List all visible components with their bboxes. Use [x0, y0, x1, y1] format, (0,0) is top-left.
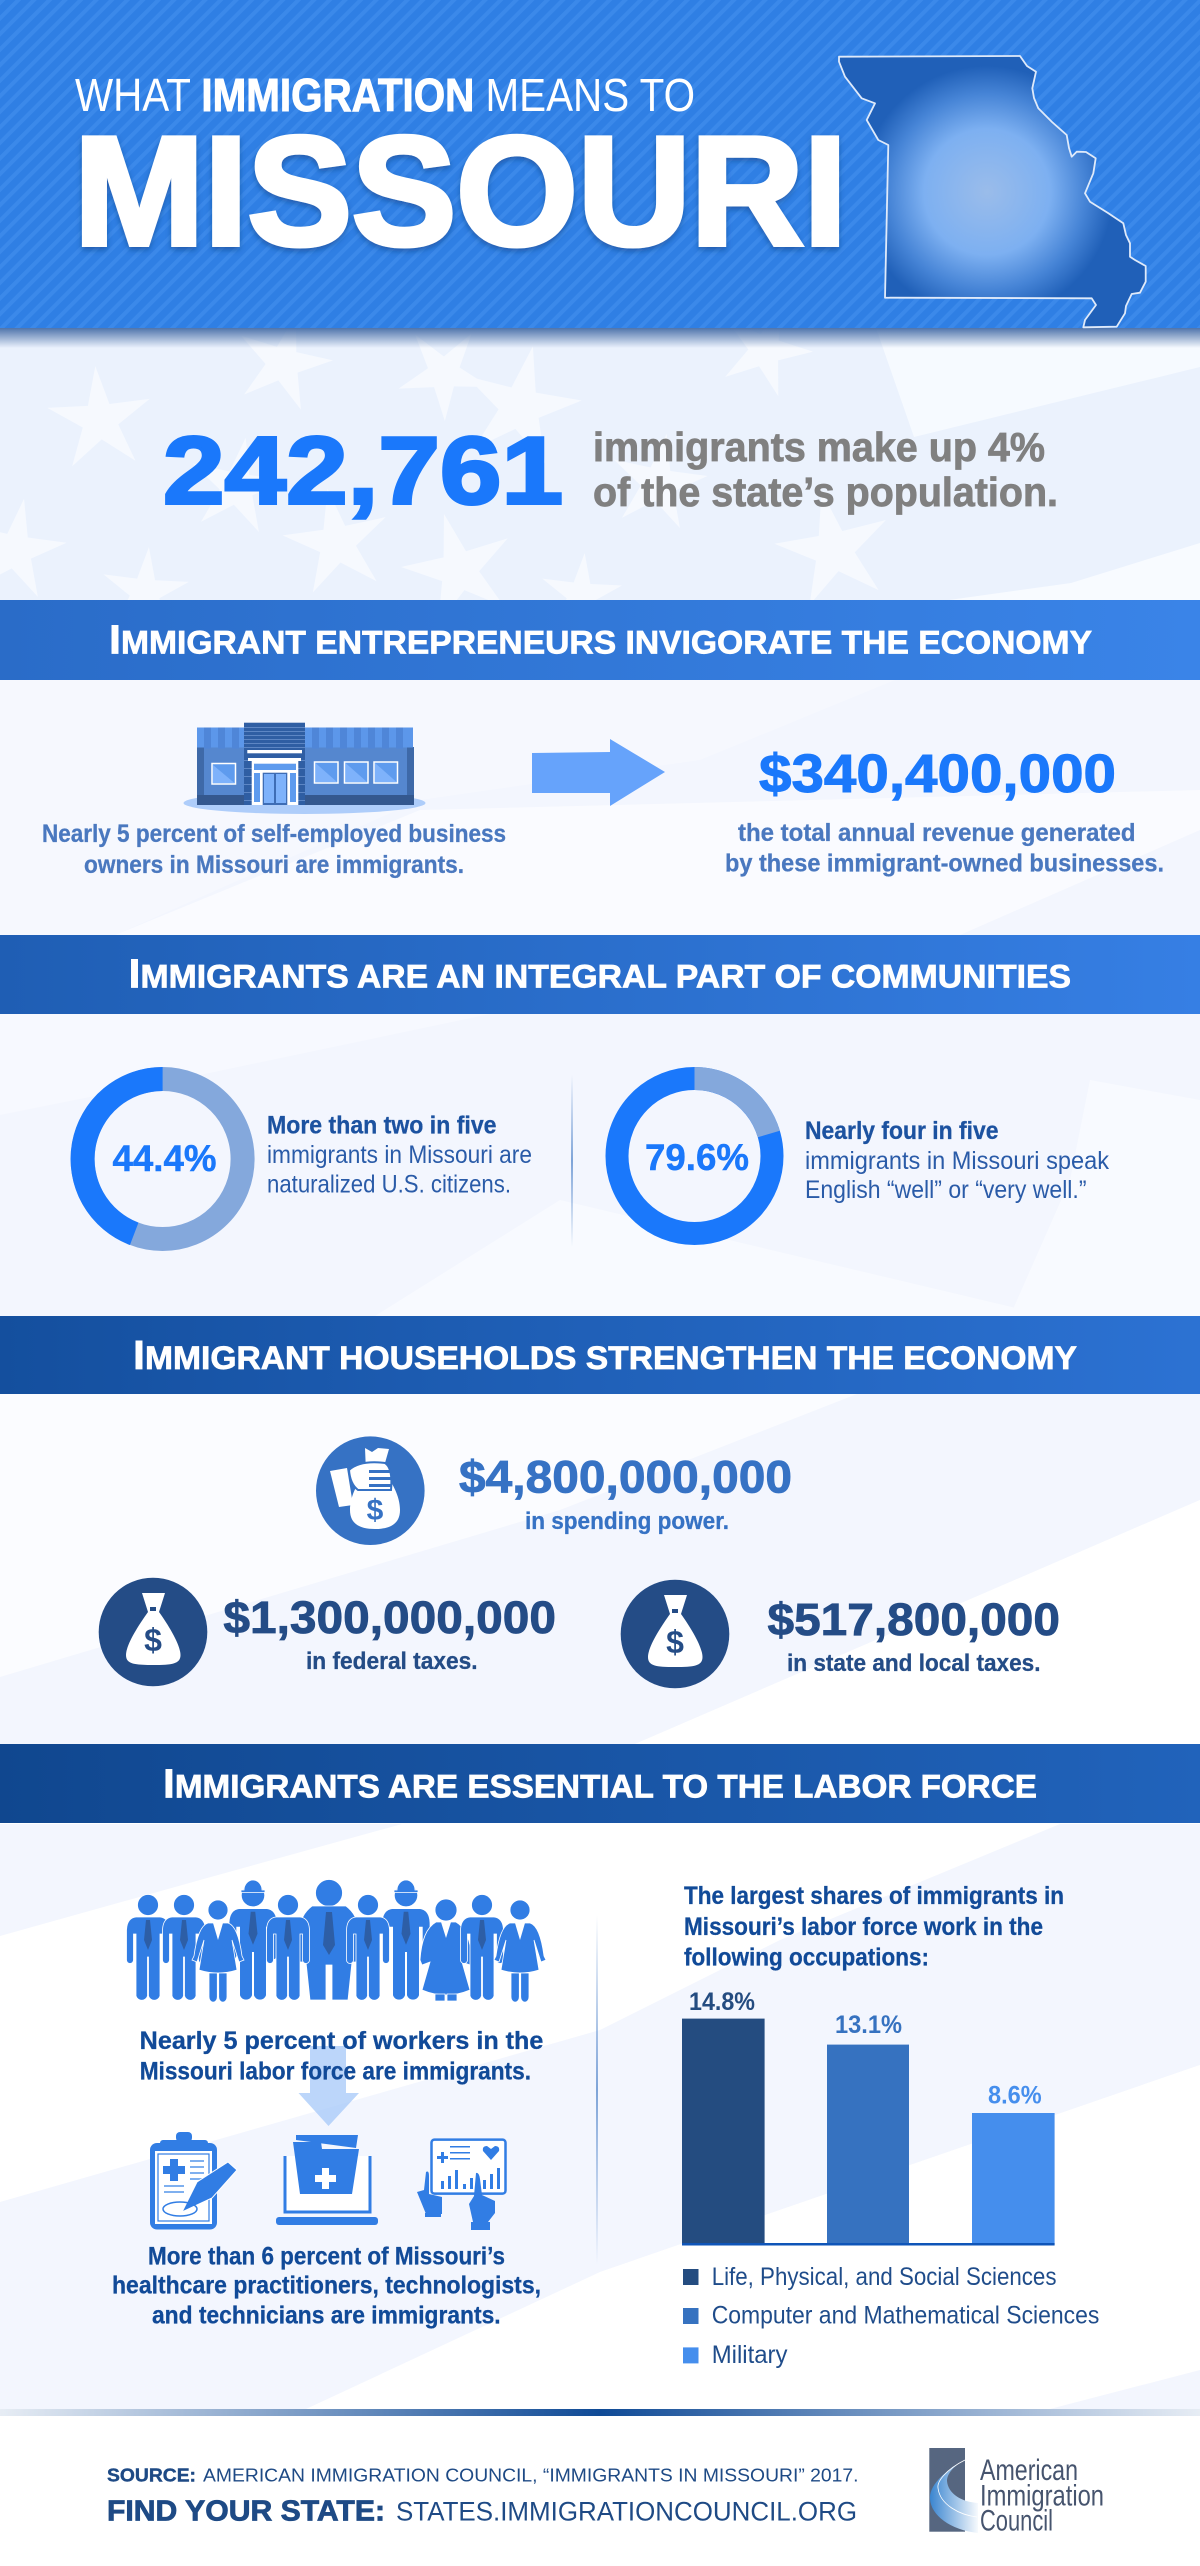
bar chart: 8.6% — [988, 2082, 1042, 2110]
population description: of the state’s population. — [593, 469, 1058, 515]
section heading band: labor force — [0, 1744, 1200, 1823]
chart title: The largest shares of immigrants in — [684, 1882, 1064, 1910]
English text — [805, 1117, 1109, 1204]
spending power stat: in spending power. — [525, 1508, 729, 1535]
source line: SOURCE: — [107, 2466, 196, 2486]
find your state line: FIND YOUR STATE: — [107, 2496, 385, 2528]
icon: storefront — [184, 723, 426, 814]
section heading band: entrepreneurs — [0, 600, 1200, 680]
population stat — [163, 418, 1058, 524]
healthcare caption: healthcare practitioners, technologists, — [112, 2272, 541, 2300]
logo: American Immigration Council: American — [980, 2454, 1078, 2487]
citizens text — [267, 1112, 532, 1198]
citizens text: More than two in five — [267, 1112, 497, 1140]
healthcare caption — [112, 2243, 541, 2330]
section heading band: households — [0, 1316, 1200, 1394]
workers caption — [140, 2027, 543, 2086]
background stars — [0, 289, 900, 632]
chart legend — [683, 2263, 1099, 2369]
revenue stat — [725, 744, 1164, 878]
find your state line: STATES.IMMIGRATIONCOUNCIL.ORG — [396, 2497, 857, 2527]
federal taxes stat: in federal taxes. — [306, 1648, 478, 1675]
entrepreneurs caption: owners in Missouri are immigrants. — [84, 851, 464, 879]
citizens text: naturalized U.S. citizens. — [267, 1170, 511, 1198]
icon: hand holding money bag — [316, 1436, 425, 1545]
donut chart: 44.4 percent — [83, 1079, 243, 1239]
icon: money bag federal: $ — [144, 1622, 162, 1658]
icon: hand holding money bag: $ — [367, 1494, 384, 1527]
federal taxes stat — [223, 1592, 556, 1675]
source line: AMERICAN IMMIGRATION COUNCIL, “IMMIGRANTS IN MISSOURI” 2017. — [203, 2466, 858, 2486]
section heading band: communities — [0, 935, 1200, 1014]
revenue stat: the total annual revenue generated — [738, 819, 1136, 847]
icon: money bag federal — [99, 1578, 207, 1686]
revenue stat: by these immigrant-owned businesses. — [725, 850, 1164, 878]
workers caption: Missouri labor force are immigrants. — [140, 2058, 531, 2086]
revenue stat: $340,400,000 — [759, 744, 1116, 804]
arrow: down — [298, 2046, 359, 2126]
population number: 242,761 — [163, 418, 563, 524]
state and local taxes stat: $517,800,000 — [768, 1594, 1060, 1645]
section heading band: labor force: IMMIGRANTS ARE ESSENTIAL TO THE LABOR FORCE — [163, 1761, 1037, 1807]
header kicker: WHAT IMMIGRATION MEANS TO — [75, 69, 695, 121]
donut chart: 44.4 percent: 44.4% — [112, 1138, 216, 1179]
icon: laptop with medical folder — [276, 2135, 378, 2225]
logo: American Immigration Council — [929, 2448, 1104, 2538]
section heading band: communities: IMMIGRANTS ARE AN INTEGRAL PART OF COMMUNITIES — [128, 950, 1071, 996]
spending power stat — [459, 1452, 792, 1535]
bar chart: 14.8% — [689, 1988, 755, 2016]
chart title: following occupations: — [684, 1944, 929, 1972]
arrow: right — [532, 739, 665, 806]
logo: American Immigration Council: Immigration — [980, 2480, 1104, 2513]
bar chart — [682, 1988, 1055, 2246]
chart title: Missouri’s labor force work in the — [684, 1913, 1043, 1941]
icon: tablet with health data and hands — [417, 2140, 506, 2230]
section heading band: households: IMMIGRANT HOUSEHOLDS STRENGTHEN THE ECONOMY — [133, 1332, 1077, 1378]
citizens text: immigrants in Missouri are — [267, 1141, 532, 1169]
state and local taxes stat: in state and local taxes. — [787, 1650, 1040, 1677]
donut chart: 79.6 percent — [617, 1078, 772, 1234]
header title: MISSOURI — [74, 104, 847, 278]
healthcare caption: More than 6 percent of Missouri’s — [148, 2243, 505, 2271]
icon: group of workers — [126, 1880, 546, 2002]
icon: money bag state and local — [621, 1580, 729, 1688]
logo: American Immigration Council: Council — [980, 2505, 1053, 2538]
donut chart: 79.6 percent: 79.6% — [645, 1137, 749, 1178]
healthcare caption: and technicians are immigrants. — [152, 2302, 501, 2330]
federal taxes stat: $1,300,000,000 — [223, 1592, 556, 1643]
map of Missouri — [839, 56, 1146, 327]
English text: English “well” or “very well.” — [805, 1176, 1086, 1204]
find your state line — [107, 2496, 857, 2528]
chart legend: Computer and Mathematical Sciences — [712, 2302, 1099, 2330]
icon: money bag state and local: $ — [666, 1624, 684, 1660]
entrepreneurs caption: Nearly 5 percent of self-employed business — [42, 820, 506, 848]
English text: Nearly four in five — [805, 1117, 999, 1145]
entrepreneurs caption — [42, 820, 506, 879]
state and local taxes stat — [768, 1594, 1060, 1677]
bar chart: 13.1% — [835, 2011, 902, 2039]
section heading band: entrepreneurs: IMMIGRANT ENTREPRENEURS INVIGORATE THE ECONOMY — [109, 616, 1092, 662]
population description — [593, 424, 1058, 515]
chart legend: Life, Physical, and Social Sciences — [712, 2263, 1056, 2291]
workers caption: Nearly 5 percent of workers in the — [140, 2027, 543, 2055]
chart title — [684, 1882, 1064, 1972]
population description: immigrants make up 4% — [593, 424, 1045, 470]
spending power stat: $4,800,000,000 — [459, 1452, 792, 1503]
English text: immigrants in Missouri speak — [805, 1147, 1109, 1175]
chart legend: Military — [712, 2341, 788, 2369]
header panel — [0, 0, 1200, 348]
icon: clipboard and pen — [150, 2132, 237, 2230]
